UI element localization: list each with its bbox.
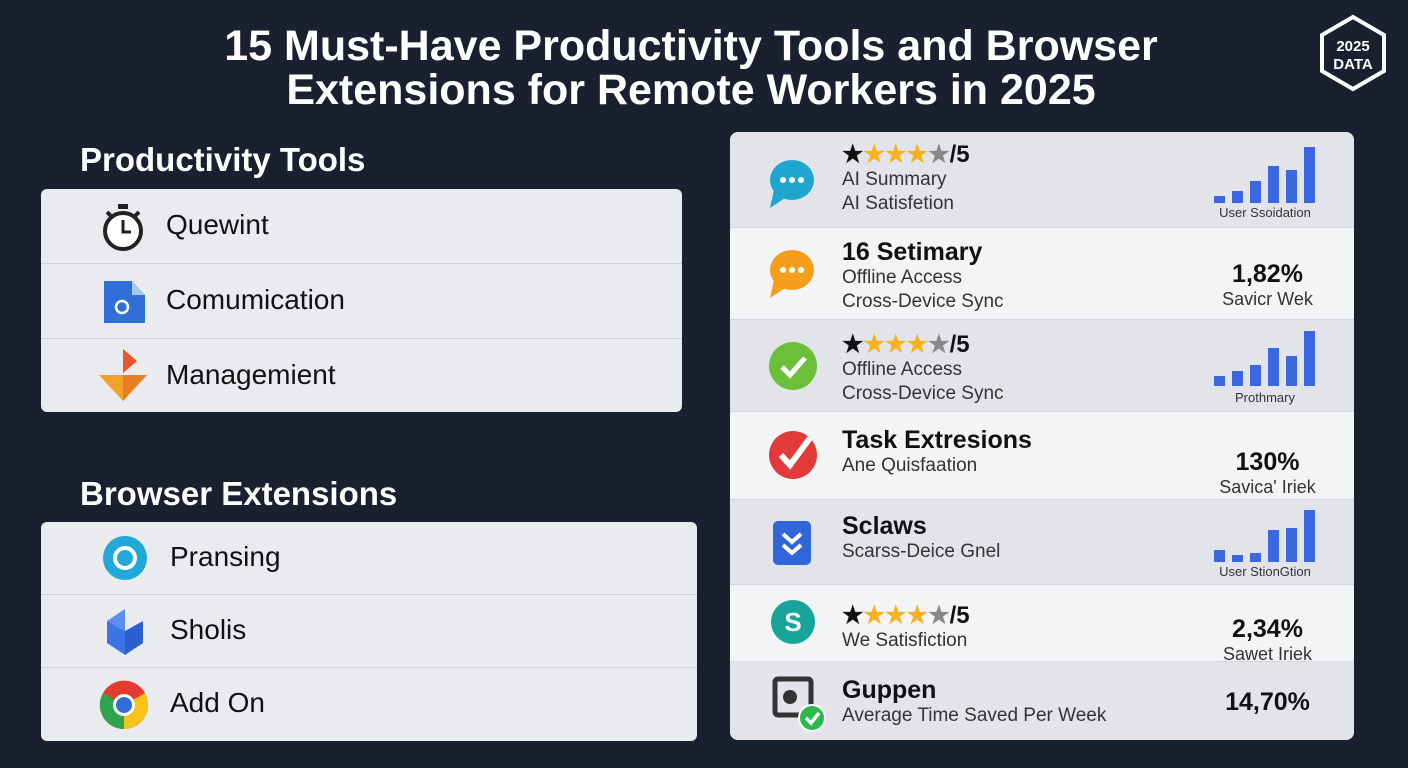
row: Managemient: Managemient [166,359,336,390]
row 1: AI Summary [730,132,1354,228]
stat: 130% [1219,448,1316,497]
icon: orange chat [770,250,814,298]
row: Managemient [99,349,336,401]
row 3: Offline Access: Cross-Device Sync [842,383,1004,404]
stat: 1,82%: 1,82% [1232,260,1303,288]
row 1: AI Summary: AI Satisfetion [842,193,954,214]
row 5: Sclaws: Sclaws [842,512,927,540]
stat: 130%: 130% [1236,448,1299,476]
row 2: 16 Setimary: 16 Setimary [842,238,982,266]
heading: browser extensions: Browser Extensions [80,475,397,512]
row: Sholis: Sholis [170,614,246,645]
panel: productivity tools [41,189,682,412]
row 7: Guppen: Guppen [842,676,936,704]
icon: teal S [771,600,815,644]
stat: 130%: Savica' Iriek [1219,477,1316,497]
icon: stopwatch [103,204,143,251]
row 6: We Satisfiction: ★★★★★/5 [842,602,970,629]
row 2: 16 Setimary: Cross-Device Sync [842,291,1004,312]
row: Quewint [41,189,682,264]
row 5: Sclaws [730,500,1354,585]
row: Pransing [41,522,697,595]
chart: user satisfaction bars [1214,147,1315,220]
row 4: Task Extresions [730,412,1354,500]
title: Extensions for Remote Workers in 2025 [286,66,1096,114]
row 2: 16 Setimary: Offline Access [842,267,962,288]
chart: user storage bars [1214,510,1315,579]
heading: productivity tools: Productivity Tools [80,141,365,178]
row: Add On: Add On [170,687,265,718]
panel: browser extensions [41,522,697,741]
row 4: Task Extresions: Ane Quisfaation [842,455,977,476]
icon: blue document [104,281,145,323]
chart: user storage bars: User StionGtion [1219,564,1311,579]
row 1: AI Summary: ★★★★★/5 [842,141,970,168]
badge: 2025 data: DATA [1333,56,1373,73]
badge: 2025 data [1320,14,1386,92]
stat: 2,34% [1223,615,1312,664]
stat: 1,82%: Savicr Wek [1222,289,1313,309]
badge: 2025 data: 2025 [1336,38,1370,55]
row 7: Guppen: Average Time Saved Per Week [842,705,1106,726]
icon: teal S: S [784,607,802,637]
icon: red check [769,431,817,479]
row 6: We Satisfiction: We Satisfiction [842,630,967,651]
row 4: Task Extresions: Task Extresions [842,426,1032,454]
row: Comumication [41,264,682,339]
row 7: Guppen [730,662,1354,740]
panel: tool ratings [730,132,1354,740]
row: Pransing: Pransing [170,541,281,572]
row 3: Offline Access: Offline Access [842,359,962,380]
stat: 14,70%: 14,70% [1225,688,1310,716]
icon: orange arrow [99,349,147,401]
title: 15 Must-Have Productivity Tools and Browser [224,22,1158,70]
icon: square with check [772,676,826,732]
row 5: Sclaws: Scarss-Deice Gnel [842,541,1000,562]
icon: teal circle [103,536,147,580]
icon: blue diamond [107,609,143,655]
icon: blue chat [770,160,814,208]
chart: productivity bars: Prothmary [1235,390,1295,405]
stat: 1,82% [1222,260,1313,309]
icon: blue chevrons [773,521,811,565]
chart: user satisfaction bars: User Ssoidation [1219,205,1311,220]
row 1: AI Summary: AI Summary [842,169,947,190]
row: Sholis [41,595,697,668]
row 3: Offline Access: ★★★★★/5 [842,331,970,358]
row: Add On [100,680,265,729]
row 6: We Satisfiction [730,585,1354,662]
row 3: Offline Access [730,320,1354,412]
stat: 2,34%: 2,34% [1232,615,1303,643]
stat: 2,34%: Sawet Iriek [1223,644,1312,664]
title [224,22,1158,114]
row: Comumication: Comumication [166,284,345,315]
row: Quewint: Quewint [166,209,269,240]
icon: chrome [100,680,148,729]
row 2: 16 Setimary [730,228,1354,320]
chart: productivity bars [1214,331,1315,405]
icon: green check [769,342,817,390]
